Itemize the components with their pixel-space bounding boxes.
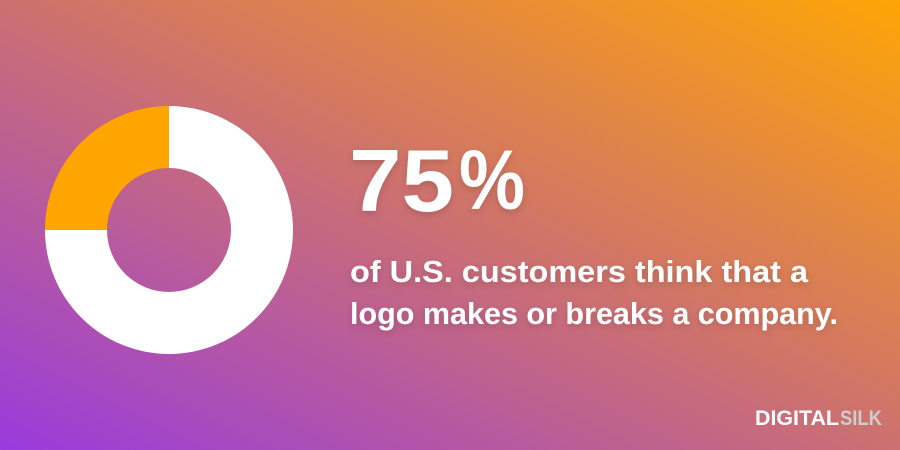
big statistic: 75% [349, 131, 525, 230]
donut chart: 75 percent [45, 106, 293, 354]
logo word: DIGITAL: DIGITAL [755, 407, 839, 430]
description line 1: of U.S. customers think that a [350, 254, 809, 289]
description line 2: logo makes or breaks a company. [350, 296, 838, 331]
big statistic: 75%: 75 [349, 131, 454, 230]
big statistic: 75%: % [459, 133, 525, 227]
description text [350, 254, 838, 331]
logo: Digital Silk [755, 407, 882, 430]
logo word: SILK: SILK [840, 407, 882, 430]
donut segment: 25% orange [45, 106, 169, 230]
donut segment: 75% white [45, 106, 293, 354]
